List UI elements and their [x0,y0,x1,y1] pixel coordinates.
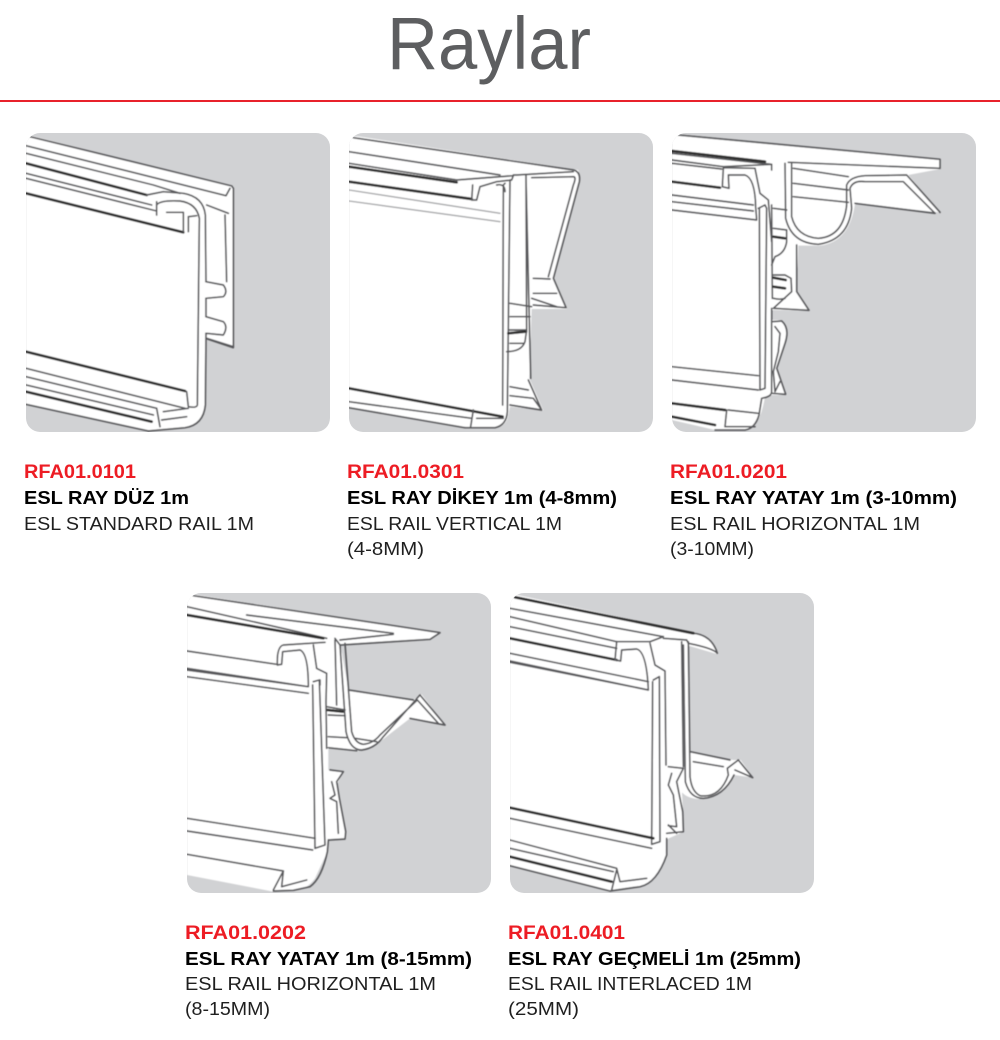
panel: RFA01.0301 vertical rail [349,133,653,432]
text block: RFA01.0202 [185,923,472,1019]
text block: RFA01.0101: ESL RAY DÜZ 1m [24,487,189,508]
text block: RFA01.0301: RFA01.0301 [347,462,464,483]
text block: RFA01.0401: RFA01.0401 [508,923,625,944]
panel: RFA01.0101 standard rail [26,133,330,432]
text block: RFA01.0202: ESL RAY YATAY 1m (8-15mm) [185,948,472,969]
text block: RFA01.0201: ESL RAIL HORIZONTAL 1M [670,513,920,534]
text block: RFA01.0201: RFA01.0201 [670,462,787,483]
panel: RFA01.0202 horizontal rail 8-15mm [187,593,491,893]
text block: RFA01.0101: ESL STANDARD RAIL 1M [24,513,254,534]
text block: RFA01.0101 [24,462,254,534]
text block: RFA01.0401: ESL RAIL INTERLACED 1M [508,973,752,994]
panel: RFA01.0201 horizontal rail 3-10mm [672,133,976,432]
text block: RFA01.0301: ESL RAIL VERTICAL 1M [347,513,562,534]
text block: RFA01.0401 [508,923,801,1019]
title: Raylar [387,2,591,85]
text block: RFA01.0301 [347,462,617,559]
text block: RFA01.0201 [670,462,957,559]
text block: RFA01.0301: ESL RAY DİKEY 1m (4-8mm) [347,487,617,508]
text block: RFA01.0401: ESL RAY GEÇMELİ 1m (25mm) [508,948,801,969]
text block: RFA01.0202: (8-15MM) [185,998,270,1019]
text block: RFA01.0201: (3-10MM) [670,538,754,559]
text block: RFA01.0202: RFA01.0202 [185,923,306,944]
panel: RFA01.0401 interlaced rail [510,593,814,893]
header divider [0,100,1000,102]
text block: RFA01.0301: (4-8MM) [347,538,424,559]
text block: RFA01.0202: ESL RAIL HORIZONTAL 1M [185,973,436,994]
text block: RFA01.0401: (25MM) [508,998,579,1019]
text block: RFA01.0201: ESL RAY YATAY 1m (3-10mm) [670,487,957,508]
text block: RFA01.0101: RFA01.0101 [24,462,136,483]
